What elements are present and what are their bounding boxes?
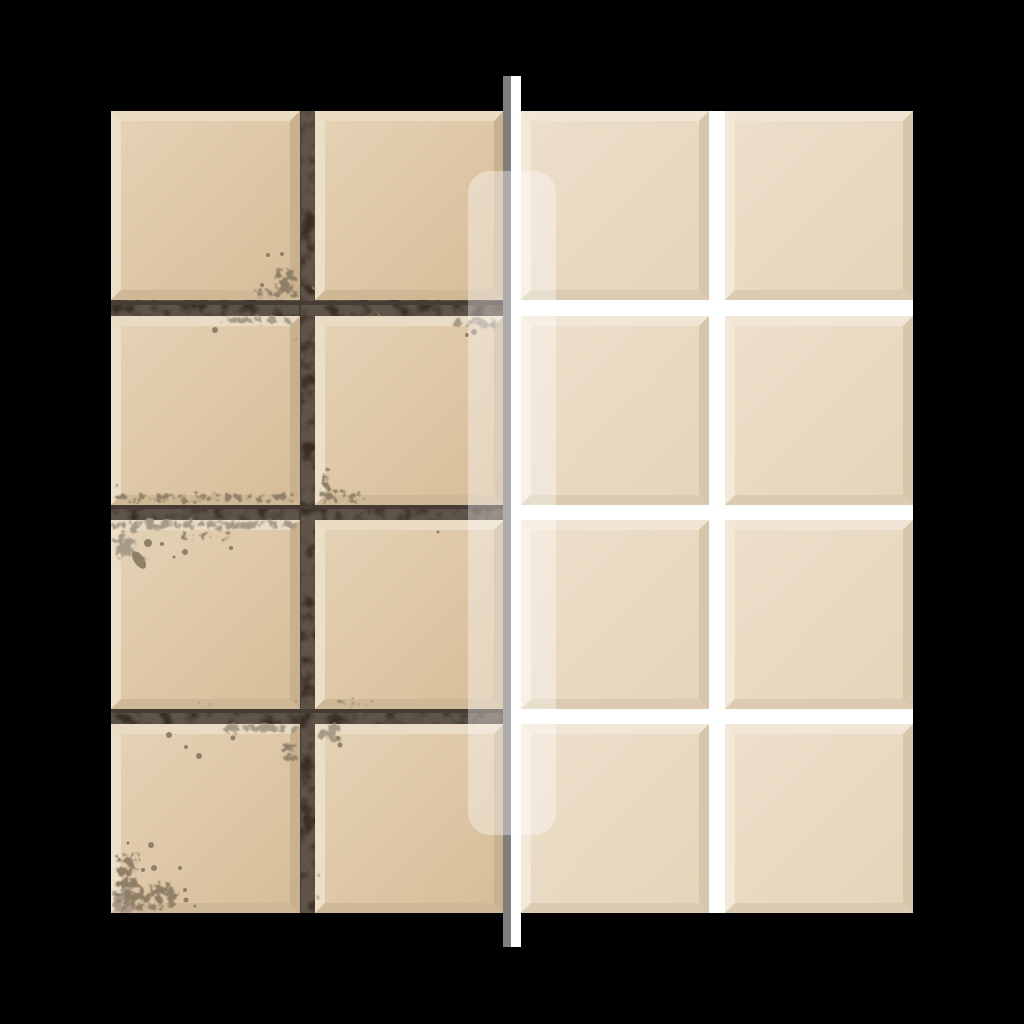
cleaning tool: translucent glass pill — [468, 171, 556, 835]
panel: clean tiles, right half — [521, 111, 913, 913]
illustration: dirty versus clean tile grout — [111, 76, 913, 947]
panel: dirty tiles, left half — [111, 111, 504, 913]
divider: white half — [511, 76, 521, 947]
grime: grey stains on dirty tiles — [108, 252, 503, 915]
divider: grey half — [503, 76, 511, 947]
grime: loose speckles — [126, 252, 477, 908]
grime: brown stains on dirty tiles — [114, 267, 381, 912]
panel: clean grout background — [503, 111, 913, 913]
panel: dirty grout background — [111, 111, 503, 913]
